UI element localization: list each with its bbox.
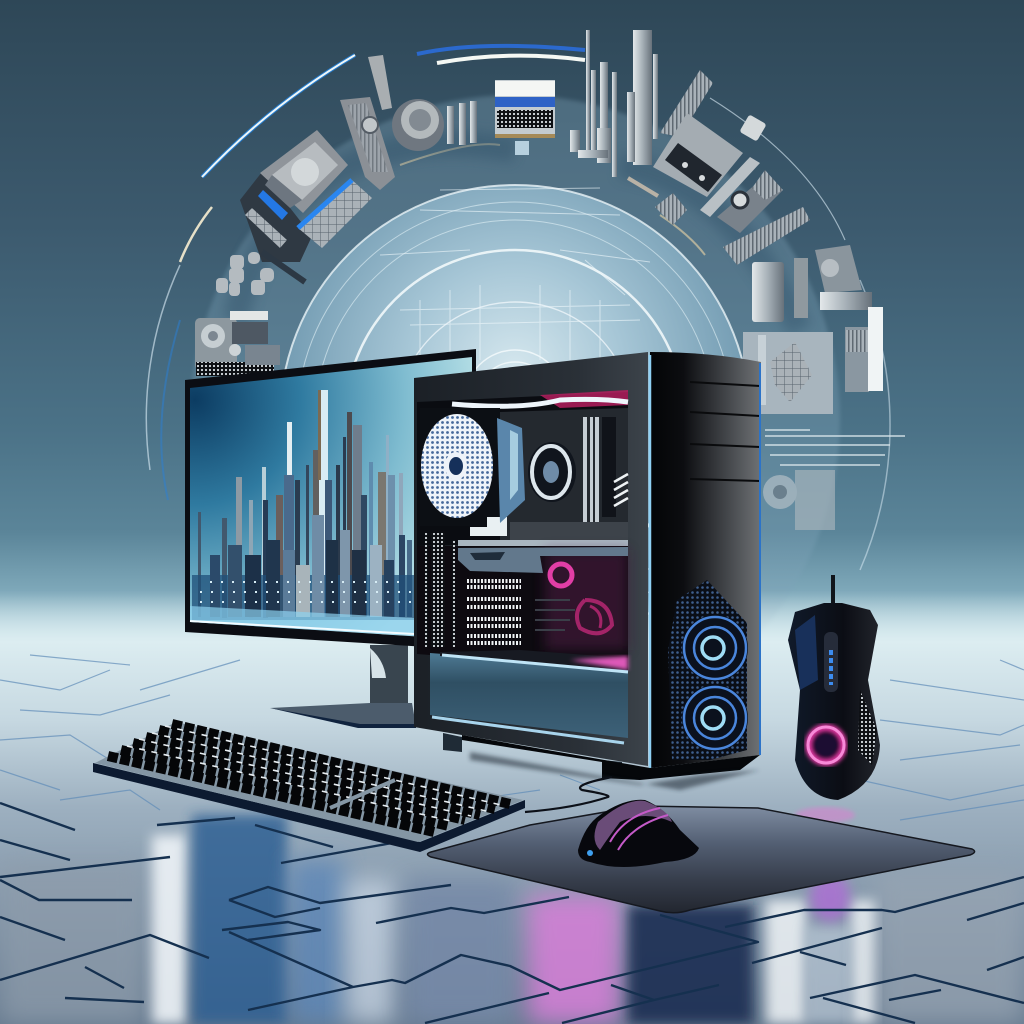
PSU shroud: [430, 653, 628, 738]
component: left stacked blobs: [216, 252, 274, 296]
holographic rings: [146, 46, 890, 655]
component: small vent: [245, 208, 287, 248]
component: connecting rod: [628, 178, 658, 196]
CPU cooler: [528, 442, 576, 502]
interior pink glow: [540, 390, 628, 408]
case divider shelf: [458, 540, 628, 546]
inner glowing disc: [280, 185, 750, 655]
mouse on pad: [578, 800, 699, 867]
pale traces on upper floor: [0, 655, 1024, 835]
component: memory sticks: [447, 101, 477, 145]
component: dark circuit cluster: [240, 172, 312, 262]
keyboard body: [95, 722, 523, 842]
standing gaming mouse: [788, 575, 880, 800]
shadow band under components: [235, 143, 800, 330]
ring of computer components: [195, 30, 905, 530]
component: small cube: [739, 114, 767, 142]
RAM dark stick: [602, 417, 616, 517]
keyboard: [93, 722, 525, 852]
tower base shadow: [462, 735, 760, 780]
keyboard section gap: [330, 780, 395, 808]
floor reflections: [152, 807, 875, 1024]
mouse blue sheen: [795, 615, 818, 690]
component: finned plug: [655, 193, 687, 225]
floor: [0, 590, 1024, 1024]
pink RGB components: [550, 564, 612, 633]
case edge blue line: [649, 355, 651, 768]
mouse body: [788, 603, 880, 800]
component: bright cylinder: [845, 307, 883, 392]
monitor stand: [270, 645, 416, 728]
case rear edge: [759, 363, 761, 755]
case bottom blue rim: [432, 717, 624, 743]
component: vertical towers: [570, 30, 658, 177]
floor tonal patches: [0, 860, 1024, 1024]
radiator fan: [420, 408, 500, 526]
mouse cable: [831, 575, 835, 612]
monitor: [185, 349, 476, 728]
mouse pad: [428, 806, 975, 913]
dark floor circuit traces: [0, 803, 1024, 1023]
component: grey remote card: [340, 97, 395, 190]
component: round cooler: [392, 99, 444, 151]
component: big chip: [743, 332, 833, 414]
graphics card: [458, 547, 628, 573]
mouse button: [824, 632, 838, 692]
side perforated strips: [425, 533, 455, 647]
upper glass bay: [417, 392, 628, 546]
component: diagonal bar: [700, 157, 760, 217]
component: lower-left base: [245, 345, 280, 365]
screen bottom highlight: [190, 621, 414, 634]
case front face frame: [414, 352, 648, 766]
component: thin column: [794, 258, 808, 318]
mouse pink ring: [808, 727, 844, 763]
case right side panel: [650, 352, 761, 768]
shroud bright rim: [442, 655, 628, 672]
component: faint lower chip: [763, 470, 835, 530]
city base glow: [190, 606, 414, 636]
top light strip: [452, 399, 628, 406]
component: main circuit board: [258, 130, 348, 220]
motherboard: [500, 408, 628, 540]
shroud pink glow: [570, 656, 628, 670]
component: column: [752, 262, 784, 322]
outer translucent disc: [190, 95, 840, 745]
component: lower-left module: [195, 311, 274, 376]
bracket highlight: [510, 430, 518, 500]
component: left diagonal rod: [262, 252, 305, 282]
component: main right block: [653, 113, 743, 197]
city lights: [200, 582, 412, 602]
RAM sticks: [583, 417, 599, 522]
CPU bracket: [497, 418, 525, 523]
cable: [525, 777, 612, 812]
component: small monitor: [495, 80, 555, 155]
component: right cluster: [815, 245, 862, 293]
component: square camera module: [717, 170, 783, 233]
vent mesh: [467, 581, 521, 643]
monitor screen: [190, 357, 472, 640]
component: threaded barrel: [723, 207, 810, 265]
pink interior haze: [545, 550, 628, 650]
component: blue-edged memory card: [298, 180, 372, 248]
component: hook bracket: [368, 55, 392, 110]
case side seams: [690, 382, 760, 481]
white corner block: [470, 517, 507, 536]
key glints: [127, 726, 501, 822]
mouse blue LEDs: [829, 650, 833, 685]
tall towers: [198, 390, 412, 618]
lower bay: [417, 546, 628, 670]
mouse side grip: [858, 690, 877, 765]
skyline on screen: [190, 390, 414, 636]
side mesh with fans: [668, 580, 748, 760]
PC tower: [414, 352, 761, 780]
component: metal plate: [820, 292, 872, 310]
board traces: [535, 600, 575, 630]
motherboard bottom detail: [510, 522, 628, 540]
monitor frame: [185, 349, 476, 650]
component: upper right part: [660, 70, 713, 137]
shroud top surface: [440, 650, 628, 670]
keyboard front edge: [93, 763, 525, 852]
case feet: [443, 733, 622, 778]
low dense blocks: [192, 515, 414, 620]
white cable stripes: [614, 474, 628, 506]
case shadow on floor: [470, 752, 760, 790]
keyboard keys: [108, 724, 510, 832]
component: faint trace lines: [765, 430, 905, 465]
